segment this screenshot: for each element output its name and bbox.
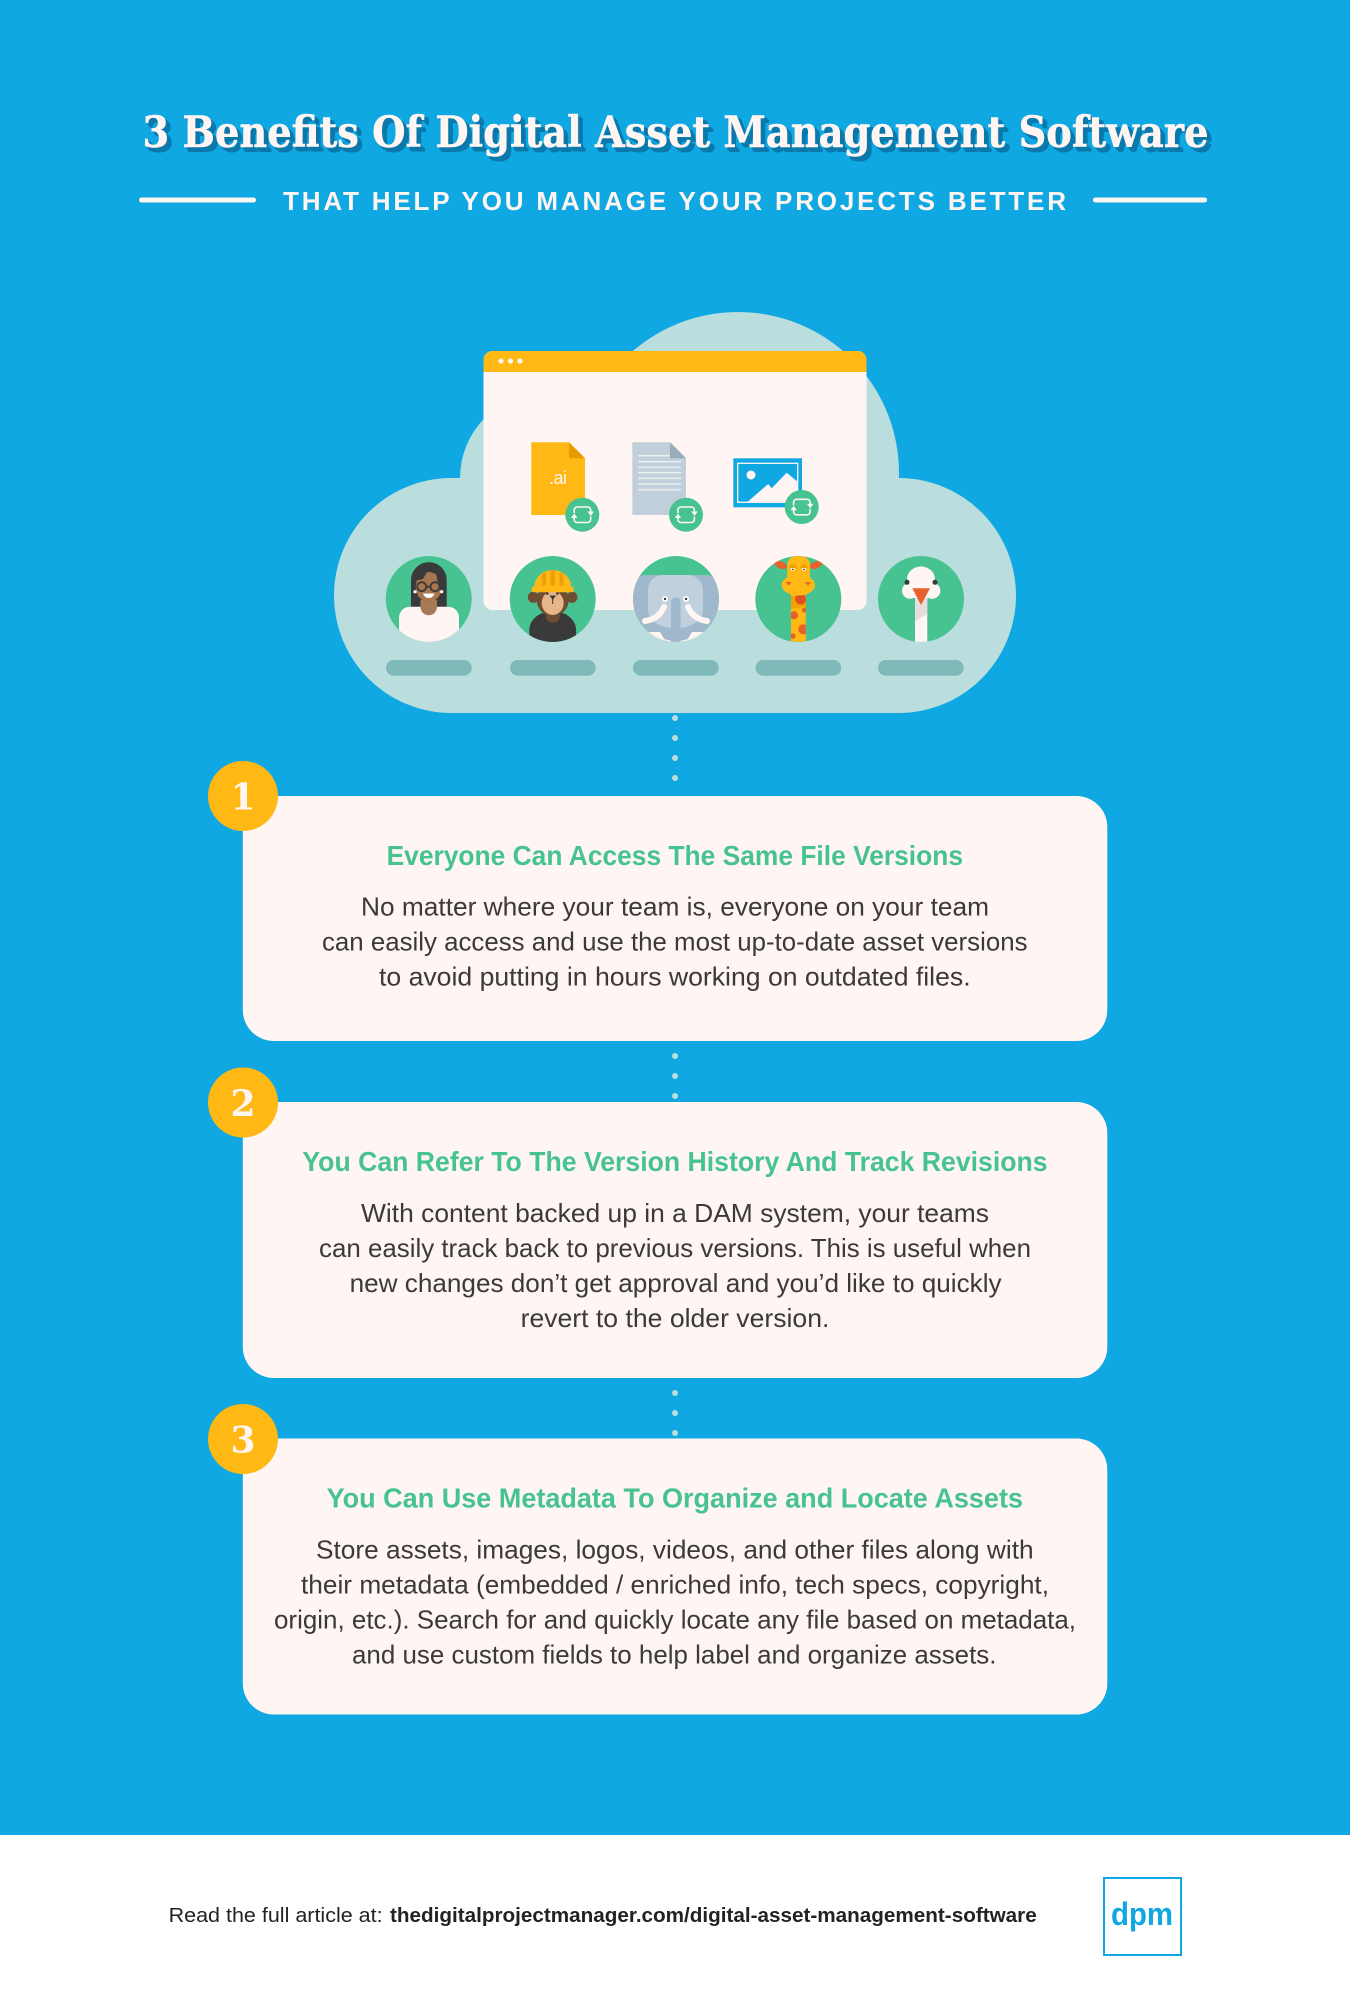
- icon: image file: [733, 458, 819, 524]
- heading 3: You Can Use Metadata To Organize and Locate Assets: [327, 1482, 1023, 1514]
- number badge 3: 3: [230, 1420, 256, 1462]
- avatar: monkey in hard hat: [510, 556, 596, 645]
- icon: ai file: .ai: [549, 468, 567, 488]
- body text 2: new changes don’t get approval and you’d like to quickly: [350, 1268, 1002, 1298]
- title: 3 Benefits Of Digital Asset Management Software: [142, 108, 1208, 158]
- icon: document file: [632, 442, 703, 532]
- number badge 2: 2: [230, 1083, 256, 1125]
- body text 1: to avoid putting in hours working on outdated files.: [379, 962, 971, 992]
- body text 1: [322, 892, 1028, 992]
- avatar: woman: [386, 556, 472, 652]
- source line: Read the full article at:: [169, 1905, 383, 1927]
- body text 3: [274, 1534, 1076, 1670]
- heading 2: You Can Refer To The Version History And Track Revisions: [302, 1146, 1048, 1177]
- number badge 2: [208, 1068, 278, 1138]
- body text 2: With content backed up in a DAM system, your teams: [361, 1198, 989, 1228]
- body text 2: revert to the older version.: [521, 1303, 829, 1333]
- cloud shape: [334, 312, 1016, 713]
- number badge 1: 1: [230, 776, 256, 818]
- browser window: [484, 351, 866, 610]
- panel: benefit 1: [208, 761, 1107, 1041]
- avatar: giraffe: [755, 556, 841, 645]
- avatar: elephant: [633, 556, 719, 650]
- body text 3: and use custom fields to help label and organize assets.: [352, 1640, 996, 1670]
- body text 2: can easily track back to previous versions. This is useful when: [319, 1233, 1031, 1263]
- logo: dpm: [1104, 1878, 1181, 1955]
- footer: [0, 1835, 1350, 2000]
- body text 1: can easily access and use the most up-to-date asset versions: [322, 926, 1028, 956]
- name placeholder bars: [386, 660, 964, 676]
- connector dots: [672, 715, 678, 1436]
- heading 1: Everyone Can Access The Same File Versions: [387, 840, 963, 871]
- body text 1: No matter where your team is, everyone on your team: [361, 892, 989, 922]
- panel: benefit 2: [208, 1068, 1107, 1378]
- body text 2: [319, 1198, 1031, 1333]
- icon: ai file: [531, 442, 599, 532]
- source line: thedigitalprojectmanager.com/digital-asset-management-software: [390, 1905, 1037, 1927]
- title: 3 Benefits Of Digital Asset Management Software: [147, 112, 1213, 162]
- avatar: ostrich: [878, 556, 964, 645]
- body text 3: Store assets, images, logos, videos, and other files along with: [316, 1534, 1034, 1564]
- number badge 3: [208, 1404, 278, 1474]
- number badge 1: [208, 761, 278, 831]
- body text 3: their metadata (embedded / enriched info, tech specs, copyright,: [301, 1570, 1049, 1600]
- body text 3: origin, etc.). Search for and quickly locate any file based on metadata,: [274, 1604, 1076, 1634]
- subtitle with rules: THAT HELP YOU MANAGE YOUR PROJECTS BETTER: [283, 186, 1066, 216]
- panel: benefit 3: [208, 1404, 1107, 1714]
- title: 3 Benefits Of Digital Asset Management Software: [146, 111, 1212, 161]
- cloud illustration: [334, 312, 1016, 713]
- logo: dpm: dpm: [1111, 1896, 1173, 1932]
